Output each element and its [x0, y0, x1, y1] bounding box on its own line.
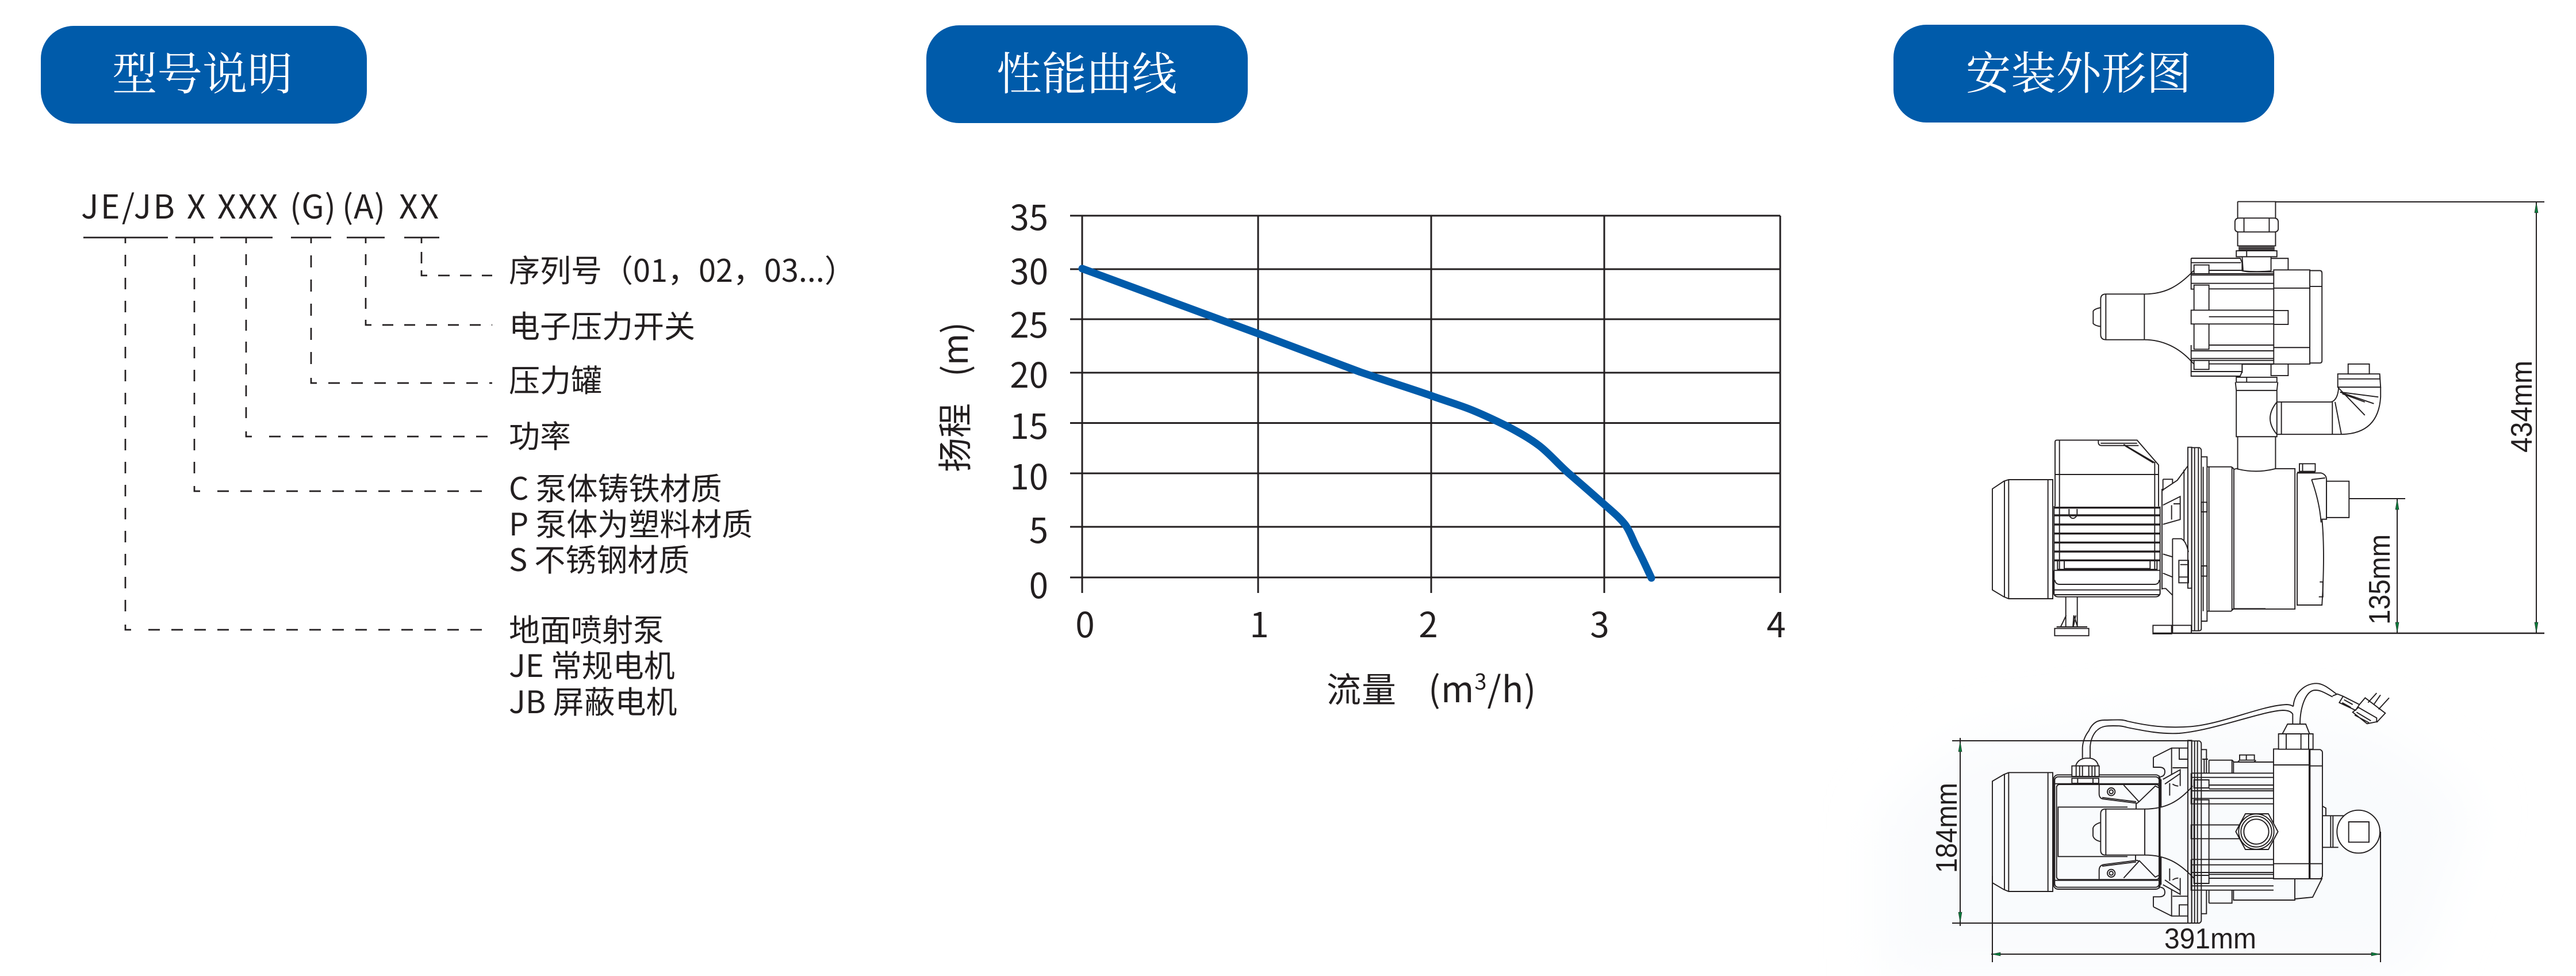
label: pump body materials: S 不锈钢材质 — [509, 535, 689, 580]
panel: model description — [41, 26, 856, 722]
power cable link — [2089, 720, 2128, 730]
label: pump and motor types: 地面喷射泵 — [509, 605, 664, 650]
heading: model description: 型号说明 — [112, 39, 293, 103]
dimension: 434mm height — [2275, 202, 2544, 633]
x-axis title: 流量 — [1327, 663, 1397, 713]
model code string: (G) — [290, 181, 336, 228]
motor, fan cover, terminal box and base — [1992, 440, 2266, 636]
dimension: 184mm width: 184mm — [1930, 783, 1964, 873]
heading: installation outline drawing: 安装外形图 — [1966, 38, 2191, 102]
x-axis ticks: 3 — [1590, 598, 1609, 648]
dimension: 391mm length: 391mm — [2164, 923, 2256, 955]
x-axis ticks: 0 — [1075, 598, 1095, 648]
label: pump and motor types: JE 常规电机 — [509, 641, 675, 686]
motor, terminal box and pressure switch dome — [1992, 730, 2201, 923]
dimension: 391mm length — [1991, 832, 2380, 962]
line chart grid — [1070, 216, 1780, 593]
y-axis title: 扬程 — [928, 403, 978, 472]
y-axis ticks: 0 — [1029, 558, 1048, 608]
base line — [2153, 633, 2544, 634]
panel: performance curve — [926, 25, 1786, 713]
y-axis title: (m) — [928, 322, 978, 377]
y-axis ticks: 35 — [1010, 190, 1048, 240]
panel: installation dimensions — [1893, 25, 2544, 962]
y-axis ticks: 20 — [1010, 348, 1048, 398]
x-axis ticks: 1 — [1249, 598, 1269, 648]
model code string: (A) — [342, 181, 385, 228]
dimension: 184mm width — [1930, 738, 2191, 926]
y-axis ticks: 10 — [1010, 450, 1048, 500]
heading: performance curve: 性能曲线 — [996, 39, 1177, 103]
pump body, switch, outlet and power cable — [2128, 683, 2389, 914]
model code string: XX — [399, 181, 439, 228]
heading: installation outline drawing — [1893, 25, 2274, 123]
drawing: pump top view — [1992, 683, 2389, 923]
label: pump body materials: P 泵体为塑料材质 — [509, 499, 753, 545]
model code string: X — [187, 181, 206, 228]
model code string: XXX — [217, 181, 278, 228]
y-axis ticks: 25 — [1010, 298, 1048, 348]
y-axis ticks — [1010, 190, 1048, 608]
dimension: 135mm outlet height: 135mm — [2363, 534, 2397, 625]
drawing: pump side elevation — [1992, 202, 2544, 636]
label: electronic pressure switch: 电子压力开关 — [509, 301, 695, 347]
y-axis ticks: 15 — [1010, 399, 1048, 449]
model code string — [81, 181, 439, 228]
fittings, elbow and pump body — [2232, 202, 2380, 609]
x-axis ticks: 4 — [1766, 598, 1786, 648]
x-axis title: /h) — [1487, 661, 1536, 713]
dimension: 434mm height: 434mm — [2505, 361, 2539, 453]
label: pump and motor types: JB 屏蔽电机 — [509, 677, 677, 722]
dimension: 135mm outlet height — [2349, 499, 2405, 633]
dashed leader lines — [125, 237, 492, 630]
code underlines — [83, 237, 439, 238]
x-axis ticks — [1075, 598, 1786, 648]
label: serial number: 序列号（01，02，03...） — [509, 246, 856, 291]
label: pump and motor types — [509, 605, 677, 722]
x-axis title: (m — [1428, 661, 1474, 713]
heading: model description — [41, 26, 367, 124]
y-axis ticks: 30 — [1010, 244, 1048, 294]
label: power: 功率 — [509, 411, 571, 457]
y-axis title — [928, 322, 978, 472]
heading: performance curve — [926, 25, 1248, 123]
pump curve — [1082, 269, 1651, 578]
label: pump body materials — [509, 464, 753, 580]
x-axis ticks: 2 — [1419, 598, 1438, 648]
y-axis ticks: 5 — [1029, 503, 1048, 553]
x-axis title: 3 — [1474, 664, 1487, 696]
pressure switch dome and housing — [2093, 258, 2288, 376]
label: pump body materials: C 泵体铸铁材质 — [509, 464, 722, 509]
model code string: JE/JB — [81, 181, 175, 228]
label: pressure tank: 压力罐 — [509, 355, 602, 401]
